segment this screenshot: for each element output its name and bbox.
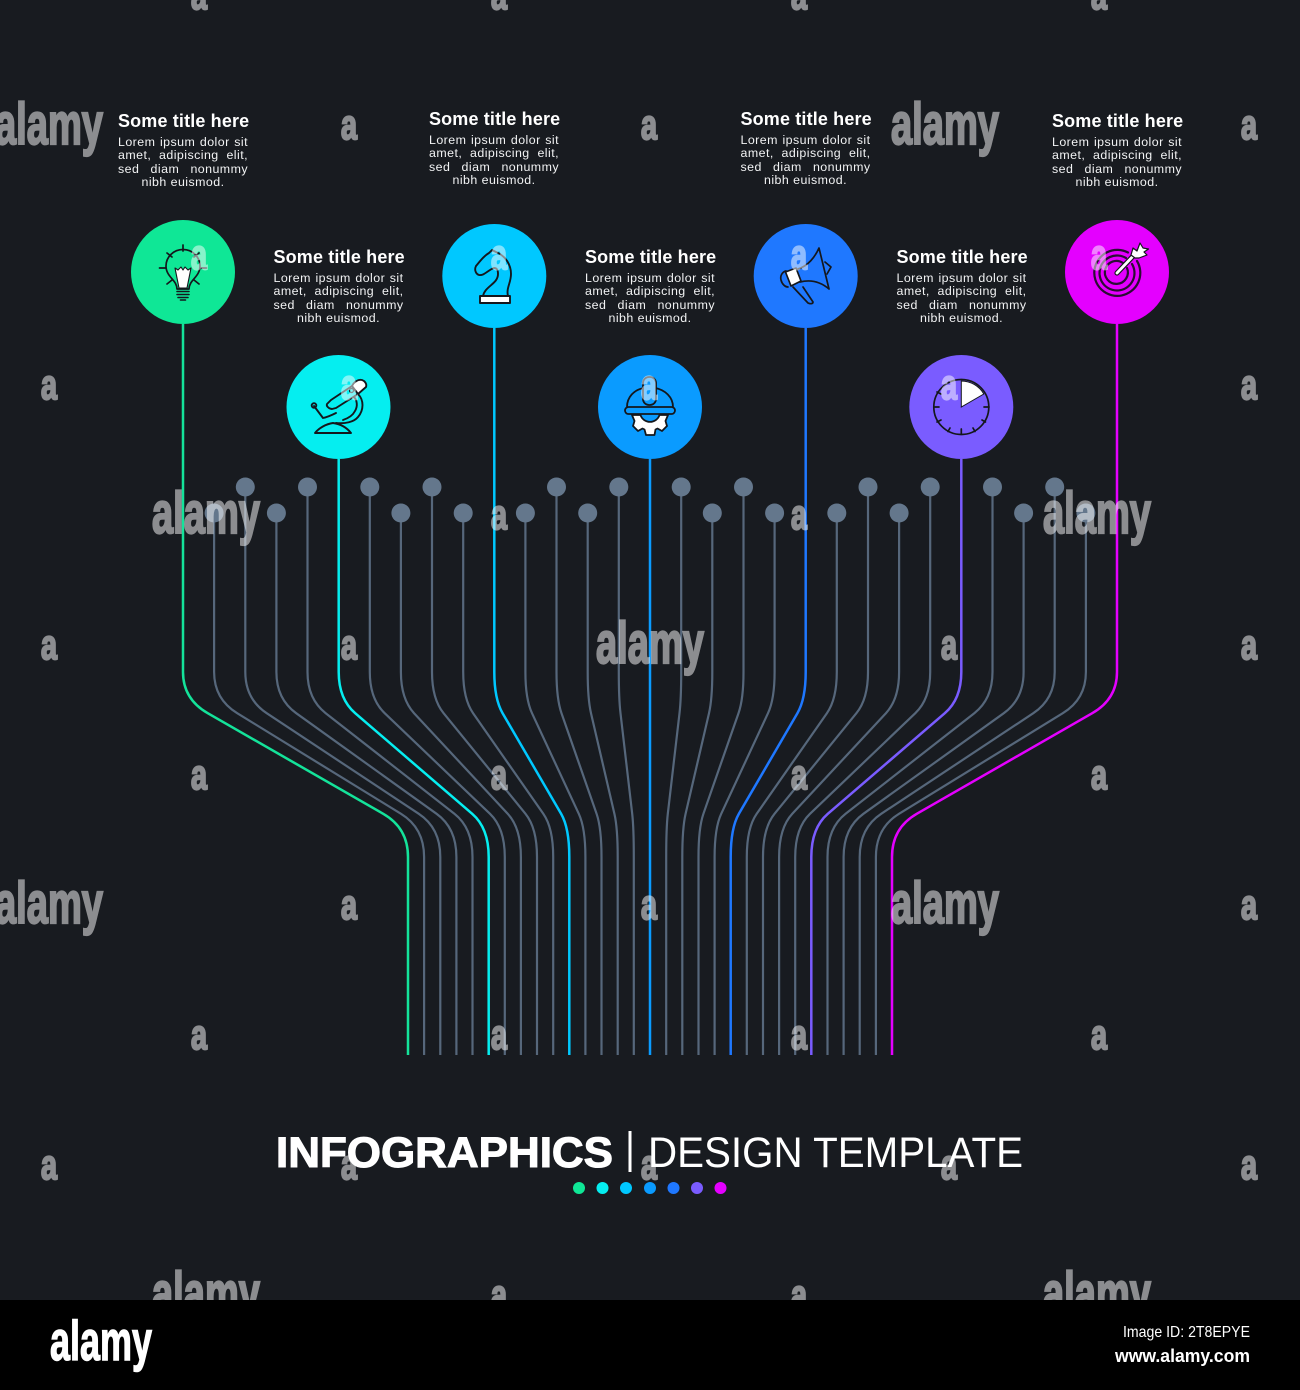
footer url: www.alamy.com	[1114, 1346, 1250, 1366]
heading separator	[628, 1131, 632, 1172]
watermarks: a	[791, 751, 807, 798]
watermarks: a	[341, 101, 357, 148]
watermarks: a	[941, 361, 957, 408]
text block 4	[585, 247, 716, 325]
line: sky blue	[494, 328, 569, 1055]
watermarks: a	[791, 1011, 807, 1058]
icon: megaphone	[781, 248, 831, 304]
line: azure	[649, 459, 651, 1055]
text block 6: nibh euismod.	[920, 311, 1003, 325]
watermarks: a	[1241, 361, 1257, 408]
line: violet	[811, 459, 961, 1055]
watermarks: a	[341, 1141, 357, 1188]
watermarks: a	[341, 621, 357, 668]
watermarks: alamy	[152, 1261, 260, 1326]
watermarks: a	[491, 1271, 507, 1318]
node: magenta circle	[1065, 220, 1169, 324]
watermarks: a	[41, 1141, 57, 1188]
icon: microscope	[312, 380, 366, 433]
text block 2: nibh euismod.	[297, 311, 380, 325]
text block 3: amet, adipiscing elit,	[429, 146, 559, 160]
text block 7: nibh euismod.	[1076, 175, 1158, 189]
watermarks: alamy	[891, 871, 999, 936]
text block 5: sed diam nonummy	[740, 160, 870, 174]
watermarks: a	[1091, 751, 1107, 798]
node: azure circle	[598, 355, 702, 459]
text block 4: Some title here	[585, 247, 716, 267]
grey connector lines right	[666, 487, 1086, 1055]
footer bar	[0, 1300, 1300, 1390]
watermarks: a	[191, 1011, 207, 1058]
node: sky circle	[442, 224, 546, 328]
text block 3: Some title here	[429, 109, 560, 129]
text block 1: amet, adipiscing elit,	[118, 148, 248, 162]
text block 3: sed diam nonummy	[429, 160, 559, 174]
line: green	[183, 324, 408, 1055]
icon: clock wedge	[934, 380, 989, 434]
text block 7: amet, adipiscing elit,	[1052, 148, 1182, 162]
text block 4: nibh euismod.	[608, 311, 692, 325]
text block 2: sed diam nonummy	[274, 298, 404, 312]
colour dots	[573, 1182, 726, 1194]
text block 6: amet, adipiscing elit,	[896, 284, 1026, 298]
text block 7: Lorem ipsum dolor sit	[1052, 135, 1182, 149]
icon: light bulb	[160, 245, 206, 300]
watermarks: a	[191, 751, 207, 798]
footer image id: Image ID: 2T8EPYE	[1123, 1324, 1250, 1341]
node: green circle	[131, 220, 235, 324]
text block 1: nibh euismod.	[142, 175, 224, 189]
watermarks: a	[1091, 1011, 1107, 1058]
footer logo: alamy	[50, 1309, 152, 1372]
text block 2: Some title here	[274, 247, 405, 267]
watermarks: a	[341, 361, 357, 408]
text block 2	[274, 247, 405, 325]
node: cyan circle	[286, 355, 390, 459]
text block 4: Lorem ipsum dolor sit	[585, 271, 715, 285]
watermarks: a	[491, 751, 507, 798]
text block 4: sed diam nonummy	[585, 298, 715, 312]
text block 3: Lorem ipsum dolor sit	[429, 133, 559, 147]
heading light: DESIGN TEMPLATE	[648, 1129, 1023, 1177]
watermarks: a	[491, 491, 507, 538]
text block 6: Some title here	[896, 247, 1028, 267]
watermarks: a	[941, 1141, 957, 1188]
icon: helmet with gear	[625, 377, 675, 435]
watermarks: a	[41, 621, 57, 668]
text block 2: Lorem ipsum dolor sit	[274, 271, 404, 285]
text block 3: nibh euismod.	[452, 173, 536, 187]
watermarks: alamy	[596, 611, 704, 676]
node: violet circle	[909, 355, 1013, 459]
text block 2: amet, adipiscing elit,	[274, 284, 404, 298]
watermarks: a	[491, 231, 507, 278]
line: cyan	[339, 459, 489, 1055]
text block 1	[118, 111, 249, 189]
text block 5: Some title here	[740, 109, 872, 129]
text block 5: amet, adipiscing elit,	[740, 146, 870, 160]
watermarks: a	[641, 1141, 657, 1188]
line: magenta	[892, 324, 1117, 1055]
grey line end dots	[205, 478, 1095, 522]
text block 7: sed diam nonummy	[1052, 162, 1182, 176]
watermarks: a	[341, 881, 357, 928]
heading bold: INFOGRAPHICS	[276, 1129, 613, 1177]
text block 3	[429, 109, 560, 187]
watermarks: a	[1241, 101, 1257, 148]
watermarks: a	[641, 881, 657, 928]
watermarks: a	[641, 361, 657, 408]
watermarks: a	[41, 361, 57, 408]
watermarks: a	[1091, 231, 1107, 278]
text block 1: sed diam nonummy	[118, 162, 248, 176]
node: blue circle	[754, 224, 858, 328]
watermarks: a	[941, 621, 957, 668]
watermarks: a	[1241, 1141, 1257, 1188]
text block 4: amet, adipiscing elit,	[585, 284, 715, 298]
watermarks: a	[491, 1011, 507, 1058]
watermarks: alamy	[152, 481, 260, 546]
text block 7: Some title here	[1052, 111, 1183, 131]
watermarks: a	[641, 101, 657, 148]
grey connector lines left	[214, 487, 634, 1055]
watermarks: alamy	[891, 92, 999, 157]
watermarks: a	[791, 1271, 807, 1318]
watermarks: alamy	[1043, 1261, 1151, 1326]
line: blue	[731, 328, 806, 1055]
watermarks: a	[1241, 621, 1257, 668]
text block 5: Lorem ipsum dolor sit	[740, 133, 870, 147]
icon: target with dart	[1094, 243, 1148, 296]
text block 5: nibh euismod.	[764, 173, 847, 187]
text block 1: Lorem ipsum dolor sit	[118, 135, 248, 149]
text block 6: Lorem ipsum dolor sit	[896, 271, 1026, 285]
watermarks: a	[791, 231, 807, 278]
text block 7	[1052, 111, 1183, 189]
watermarks: a	[1241, 881, 1257, 928]
text block 1: Some title here	[118, 111, 249, 131]
text block 6	[896, 247, 1028, 325]
text block 5	[740, 109, 872, 187]
watermarks: alamy	[1043, 481, 1151, 546]
text block 6: sed diam nonummy	[896, 298, 1026, 312]
watermarks: a	[191, 231, 207, 278]
icon: chess knight	[475, 250, 511, 303]
watermarks: a	[791, 491, 807, 538]
